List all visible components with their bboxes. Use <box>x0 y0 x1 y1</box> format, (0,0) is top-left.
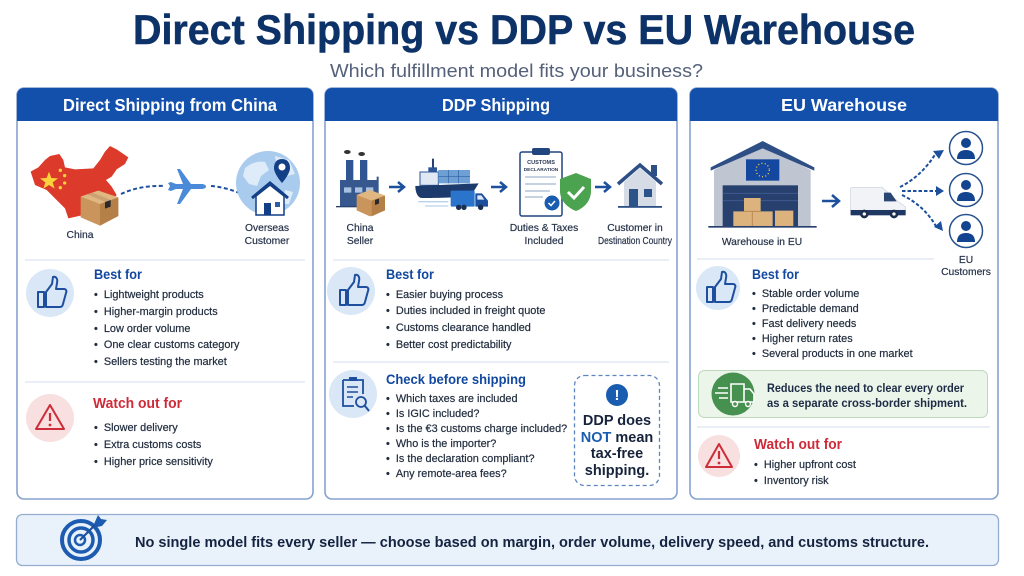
icon: warning <box>26 394 74 442</box>
icon: target with arrow <box>62 515 107 559</box>
check before shipping list: • Is IGIC included? <box>386 408 479 420</box>
panel: EU warehouse <box>690 88 998 499</box>
watch out for list: • Inventory risk <box>754 475 829 487</box>
callout: DDP does not mean tax-free shipping: DDP does <box>583 413 651 429</box>
arrowheads <box>933 150 944 231</box>
arrows: dashed routes to customers <box>900 153 937 228</box>
icon: cargo ship with truck <box>415 159 488 210</box>
icon: warehouse with EU flag <box>708 141 817 228</box>
icon: globe with house and pin <box>236 151 300 215</box>
panel heading: direct shipping <box>17 88 313 121</box>
panel heading: direct shipping: Direct Shipping from China <box>63 95 277 115</box>
callout: DDP does not mean tax-free shipping: NOT mean <box>581 430 653 446</box>
label: overseas customer: Overseas <box>245 223 289 234</box>
label: overseas customer: Customer <box>245 236 290 247</box>
panel heading: DDP <box>325 88 677 121</box>
label: overseas customer <box>245 223 290 247</box>
best for list: • Customs clearance handled <box>386 322 531 334</box>
label: customer in destination country <box>598 223 673 247</box>
callout: reduces customs clearance: Reduces the need to clear every order <box>767 383 964 395</box>
best for list: • Stable order volume <box>752 288 859 300</box>
icon: house <box>618 165 662 208</box>
icon: warning <box>698 435 740 477</box>
watch out for list: • Slower delivery <box>94 422 178 434</box>
label: EU customers: Customers <box>941 267 991 278</box>
best for list: • One clear customs category <box>94 339 240 351</box>
callout: reduces customs clearance: as a separate cross-border shipment. <box>767 398 967 410</box>
title: Direct Shipping vs DDP vs EU Warehouse <box>133 6 915 53</box>
check before shipping list: • Is the declaration compliant? <box>386 453 534 465</box>
best for list: Best for <box>386 266 434 282</box>
best for list: • Predictable demand <box>752 303 859 315</box>
label: warehouse in EU: Warehouse in EU <box>722 237 802 248</box>
callout: DDP does not mean tax-free shipping: shipping. <box>585 463 649 479</box>
callout: DDP does not mean tax-free shipping <box>574 376 660 486</box>
check before shipping list: Check before shipping <box>386 371 526 387</box>
best for list: • Sellers testing the market <box>94 356 227 368</box>
arrow <box>595 182 610 192</box>
icon: EU customer middle <box>950 174 982 206</box>
check before shipping list <box>386 371 567 480</box>
watch out for list <box>754 437 856 487</box>
best for list: • Low order volume <box>94 323 190 335</box>
label: customer in destination country: Destination Country <box>598 236 673 247</box>
best for list: • Several products in one market <box>752 348 913 360</box>
icon: customs declaration clipboard with shield: DECLARATION <box>524 167 559 173</box>
best for list: • Fast delivery needs <box>752 318 857 330</box>
best for list: • Better cost predictability <box>386 339 512 351</box>
icon: customs declaration clipboard with shield <box>520 148 591 216</box>
icon: factory with parcel <box>336 150 385 216</box>
best for list <box>386 266 545 351</box>
label: China seller: China <box>347 223 374 234</box>
panel heading: EU warehouse: EU Warehouse <box>781 95 907 115</box>
icon: delivery van <box>851 187 906 218</box>
watch out for list: • Higher upfront cost <box>754 459 856 471</box>
callout: DDP does not mean tax-free shipping: ! <box>614 387 620 404</box>
best for list: • Easier buying process <box>386 289 504 301</box>
best for list <box>94 266 240 368</box>
callout: DDP does not mean tax-free shipping: tax-free <box>591 446 643 462</box>
panel: DDP shipping <box>325 88 677 499</box>
icon: customs declaration clipboard with shield: CUSTOMS <box>527 160 555 166</box>
check before shipping list: • Which taxes are included <box>386 393 518 405</box>
panel: direct shipping from China <box>17 88 313 499</box>
best for list <box>752 266 913 360</box>
watch out for list <box>93 396 213 468</box>
arrow <box>822 195 839 207</box>
best for list: • Lightweight products <box>94 289 204 301</box>
label: China: China <box>67 230 94 241</box>
watch out for list: Watch out for <box>93 396 182 412</box>
subtitle: Which fulfillment model fits your business? <box>330 60 703 81</box>
arrow <box>491 182 506 192</box>
label: duties and taxes: Included <box>525 236 564 247</box>
label: customer in destination country: Customer in <box>607 223 663 234</box>
icon: airplane <box>168 169 206 204</box>
label: China seller: Seller <box>347 236 374 247</box>
watch out for list: • Higher price sensitivity <box>94 456 213 468</box>
label: duties and taxes <box>510 223 578 247</box>
panel heading: DDP: DDP Shipping <box>442 95 550 115</box>
best for list: Best for <box>94 266 142 282</box>
check before shipping list: • Is the €3 customs charge included? <box>386 423 567 435</box>
icon: clipboard with magnifier <box>329 370 377 418</box>
label: duties and taxes: Duties & Taxes <box>510 223 578 234</box>
label: EU customers <box>941 255 991 278</box>
label: EU customers: EU <box>959 255 973 266</box>
icon: EU customer bottom <box>950 214 982 248</box>
icon: thumbs up <box>327 267 375 315</box>
banner: key takeaway <box>16 514 998 566</box>
best for list: • Higher return rates <box>752 333 853 345</box>
check before shipping list: • Who is the importer? <box>386 438 496 450</box>
best for list: • Duties included in freight quote <box>386 305 545 317</box>
icon: EU customer top <box>950 132 982 164</box>
icon: China map with parcel <box>31 146 128 226</box>
takeaway text: No single model fits every seller — choose based on margin, order volume, delivery speed, and customs structure. <box>135 535 929 551</box>
watch out for list: • Extra customs costs <box>94 439 202 451</box>
arrow <box>389 182 404 192</box>
best for list: Best for <box>752 266 799 282</box>
arrow: dashed flight path <box>121 186 239 194</box>
icon: thumbs up <box>26 269 74 317</box>
panel heading: EU warehouse <box>690 88 998 121</box>
callout: reduces customs clearance <box>698 370 988 418</box>
best for list: • Higher-margin products <box>94 306 218 318</box>
check before shipping list: • Any remote-area fees? <box>386 468 507 480</box>
label: China seller <box>347 223 374 247</box>
watch out for list: Watch out for <box>754 437 842 453</box>
icon: thumbs up <box>696 266 740 310</box>
